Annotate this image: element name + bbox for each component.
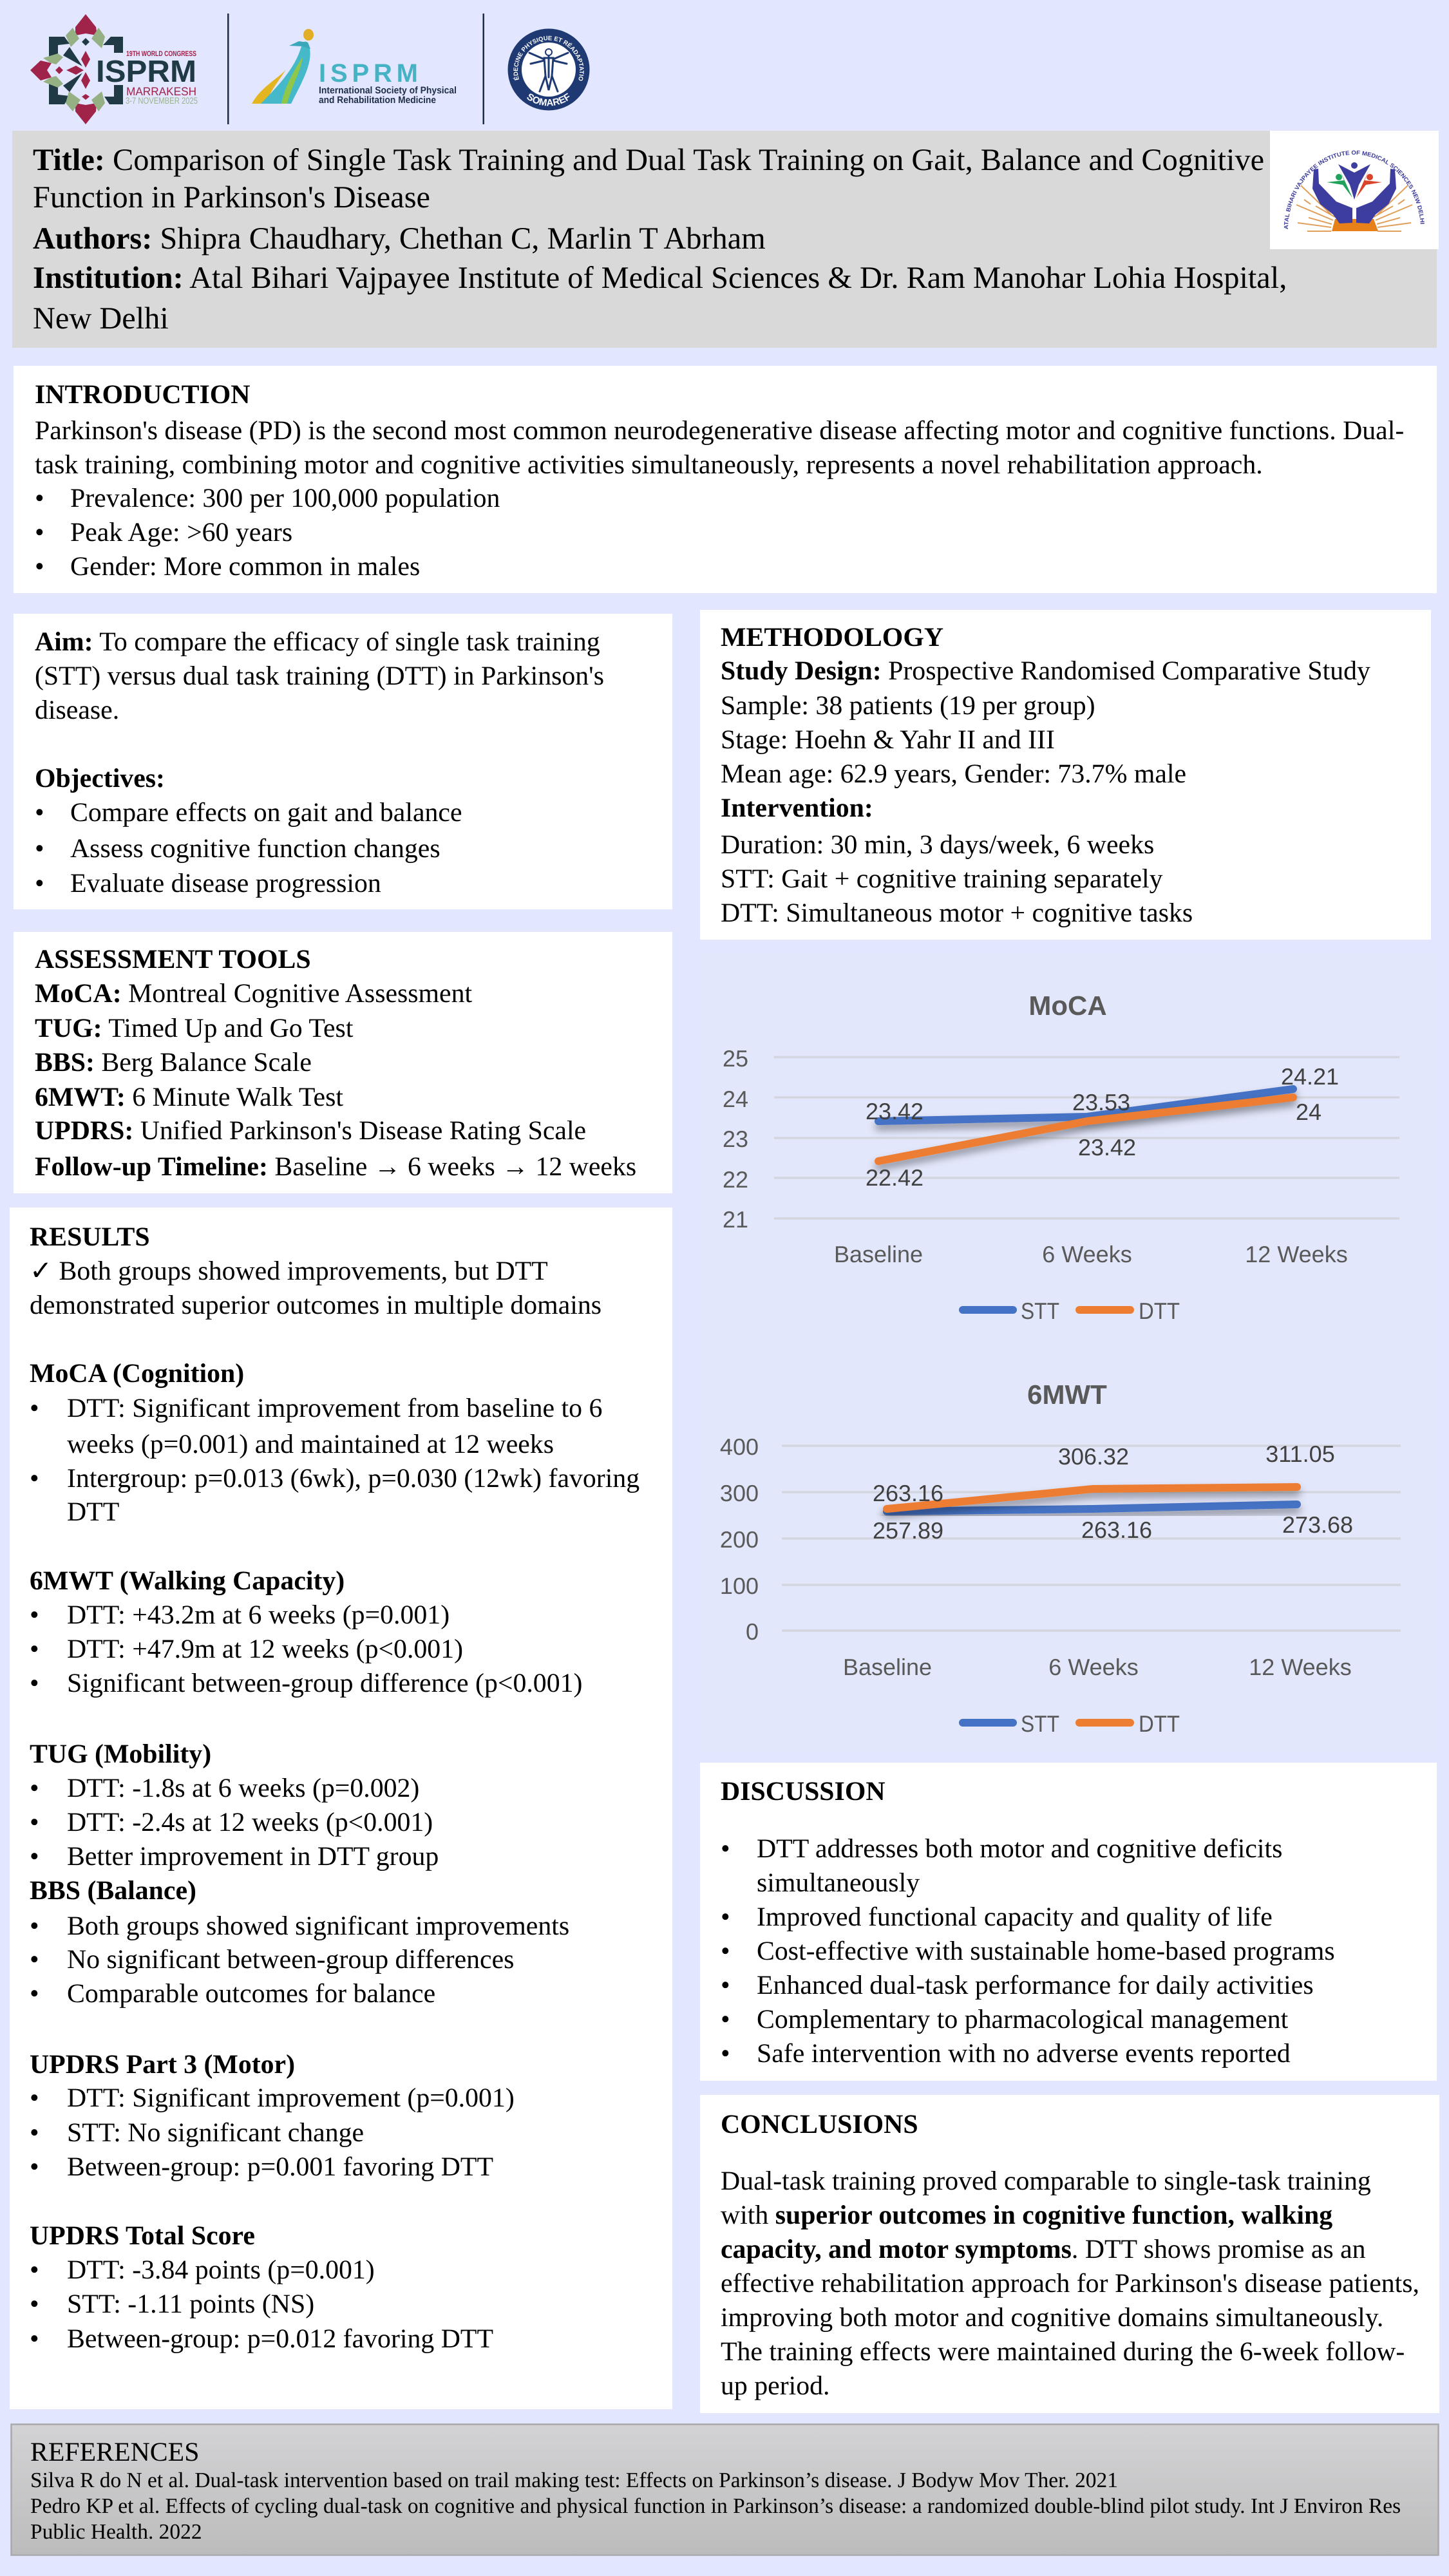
results: MoCA — [30, 1359, 639, 1527]
results: BBS: Comparable outcomes for balance — [67, 1979, 435, 2009]
logo: ISPRM 19th World Congress Marrakesh: ISPRM — [96, 55, 196, 89]
data labels: 24.21 — [1281, 1063, 1339, 1090]
data labels — [866, 1063, 1339, 1191]
results: 6MWT: DTT: +47.9m at 12 weeks (p<0.001) — [67, 1634, 463, 1664]
list: discussion points: • — [721, 1834, 730, 1864]
panel: introduction — [14, 366, 1437, 593]
text block: references: Public Health. 2022 — [30, 2520, 202, 2544]
results: TUG: TUG (Mobility) — [30, 1739, 211, 1769]
list: key facts: • — [35, 484, 44, 513]
chart: MoCA line chart — [723, 990, 1399, 1324]
results: TUG: • — [30, 1842, 39, 1871]
logo: ISPRM 19th World Congress Marrakesh — [30, 14, 198, 124]
results: UPDRS total: UPDRS Total Score — [30, 2221, 255, 2251]
study design: Stage: Hoehn & Yahr II and III — [721, 725, 1055, 755]
panel: discussion — [700, 1763, 1437, 2081]
list: discussion points: simultaneously — [757, 1868, 920, 1898]
text block: introduction — [35, 416, 1404, 480]
institution: Institution: Atal Bihari Vajpayee Institute of Medical Sciences & Dr. Ram Manohar Lohia Hospital, — [33, 261, 1287, 295]
logo: ISPRM society: International Society of Physical — [319, 85, 457, 96]
x axis labels: Baseline — [834, 1241, 923, 1267]
results: MoCA: • — [30, 1464, 39, 1493]
results: BBS: • — [30, 1979, 39, 2009]
study design: Sample: 38 patients (19 per group) — [721, 691, 1095, 721]
x axis labels: Baseline — [843, 1654, 932, 1680]
results: BBS: BBS (Balance) — [30, 1876, 196, 1906]
list: assessment tools: UPDRS: Unified Parkinson's Disease Rating Scale — [35, 1116, 586, 1146]
data labels: 24 — [1296, 1099, 1321, 1125]
line: DTT — [878, 1097, 1293, 1161]
legend: STT — [1021, 1298, 1059, 1324]
logo: Atal Bihari Vajpayee Institute: ATAL BIHARI VAJPAYEE INSTITUTE OF MEDICAL SCIENCES NEW DELHI — [1284, 151, 1425, 229]
y axis labels: 100 — [720, 1573, 759, 1599]
list: key facts: • — [35, 552, 44, 582]
results: UPDRS total: • — [30, 2324, 39, 2354]
list: key facts: Prevalence: 300 per 100,000 population — [70, 484, 500, 513]
list: discussion points: • — [721, 1902, 730, 1932]
results: 6MWT: • — [30, 1669, 39, 1698]
list: discussion points: Cost-effective with sustainable home-based programs — [757, 1937, 1335, 1966]
x axis labels: 12 Weeks — [1245, 1241, 1348, 1267]
results: UPDRS part 3: Between-group: p=0.001 favoring DTT — [67, 2152, 493, 2182]
aim text: Aim: To compare the efficacy of single task training — [35, 627, 600, 657]
intervention: Duration: 30 min, 3 days/week, 6 weeks — [721, 830, 1154, 860]
results: UPDRS part 3: • — [30, 2083, 39, 2113]
data labels: 263.16 — [873, 1480, 943, 1506]
y axis labels: 22 — [723, 1166, 748, 1193]
list: discussion points: • — [721, 2005, 730, 2034]
list: objectives: • — [35, 869, 44, 898]
list: discussion points: Enhanced dual-task performance for daily activities — [757, 1971, 1314, 2000]
results: 6MWT — [30, 1566, 582, 1698]
y axis labels: 21 — [723, 1206, 748, 1233]
list: discussion points: • — [721, 1937, 730, 1966]
results: UPDRS total: • — [30, 2289, 39, 2319]
data labels: 257.89 — [873, 1517, 943, 1544]
list: objectives: • — [35, 798, 44, 828]
list: assessment tools: BBS: Berg Balance Scale — [35, 1048, 312, 1077]
results: UPDRS part 3: • — [30, 2118, 39, 2148]
results: MoCA: DTT — [67, 1497, 119, 1527]
results: 6MWT: • — [30, 1634, 39, 1664]
results: UPDRS part 3: UPDRS Part 3 (Motor) — [30, 2050, 295, 2079]
intervention: DTT: Simultaneous motor + cognitive tasks — [721, 898, 1193, 928]
data labels: 311.05 — [1265, 1441, 1335, 1467]
y axis labels: 25 — [723, 1045, 748, 1072]
list: objectives: Compare effects on gait and balance — [70, 798, 462, 828]
y axis labels: 300 — [720, 1480, 759, 1506]
results: UPDRS total — [30, 2221, 493, 2354]
y axis labels: 24 — [723, 1086, 748, 1112]
logo: ISPRM 19th World Congress Marrakesh: 3-7 NOVEMBER 2025 — [126, 95, 198, 106]
list: key facts: • — [35, 518, 44, 547]
logo: ISPRM society: and Rehabilitation Medicine — [319, 95, 436, 106]
results: UPDRS part 3: STT: No significant change — [67, 2118, 364, 2148]
logo: ISPRM 19th World Congress Marrakesh: 19TH WORLD CONGRESS — [126, 50, 196, 58]
results: TUG: Better improvement in DTT group — [67, 1842, 439, 1871]
results: 6MWT: 6MWT (Walking Capacity) — [30, 1566, 345, 1596]
study design — [721, 656, 1370, 789]
logo: ISPRM society — [252, 29, 457, 106]
results: BBS: • — [30, 1911, 39, 1941]
heading: conclusions: CONCLUSIONS — [721, 2110, 918, 2139]
list: objectives — [35, 798, 462, 898]
text block: conclusions: capacity, and motor symptoms. DTT shows promise as an — [721, 2235, 1366, 2264]
y axis labels: 400 — [720, 1434, 759, 1460]
heading: references: REFERENCES — [30, 2438, 199, 2467]
text block: conclusions: effective rehabilitation approach for Parkinson's disease patients, — [721, 2269, 1419, 2298]
list: key facts: Gender: More common in males — [70, 552, 420, 582]
text block: conclusions: up period. — [721, 2371, 829, 2401]
legend: STT — [1021, 1710, 1059, 1737]
data labels: 22.42 — [866, 1164, 923, 1191]
results: MoCA: MoCA (Cognition) — [30, 1359, 244, 1388]
results: UPDRS part 3: DTT: Significant improvement (p=0.001) — [67, 2083, 515, 2113]
results: TUG — [30, 1739, 439, 1871]
text block: conclusions: Dual-task training proved comparable to single-task training — [721, 2166, 1371, 2196]
list: discussion points: • — [721, 2039, 730, 2069]
y axis labels: 0 — [746, 1618, 759, 1645]
list: assessment tools: TUG: Timed Up and Go Test — [35, 1014, 354, 1043]
results: UPDRS total: STT: -1.11 points (NS) — [67, 2289, 314, 2319]
x axis labels: 6 Weeks — [1048, 1654, 1139, 1680]
text block: conclusions: improving both motor and cognitive domains simultaneously. — [721, 2303, 1383, 2333]
logo: SOMAREF — [507, 28, 590, 111]
aim text: (STT) versus dual task training (DTT) in Parkinson's — [35, 661, 604, 691]
data labels: 263.16 — [1081, 1517, 1152, 1543]
text block: conclusions: The training effects were maintained during the 6-week follow- — [721, 2337, 1405, 2367]
intervention: STT: Gait + cognitive training separately — [721, 864, 1163, 894]
results: TUG: DTT: -2.4s at 12 weeks (p<0.001) — [67, 1808, 433, 1837]
chart title: 6MWT — [1027, 1379, 1107, 1410]
data labels: 23.42 — [866, 1098, 923, 1124]
list: assessment tools: 6MWT: 6 Minute Walk Test — [35, 1083, 343, 1112]
results: MoCA: • — [30, 1394, 39, 1423]
results: TUG: • — [30, 1808, 39, 1837]
results: BBS: No significant between-group differences — [67, 1945, 514, 1975]
logo: ISPRM 19th World Congress Marrakesh: MARRAKESH — [126, 85, 196, 98]
title: Function in Parkinson's Disease — [33, 180, 430, 214]
title — [33, 143, 1264, 214]
x axis labels: 6 Weeks — [1042, 1241, 1132, 1267]
line: DTT — [887, 1487, 1297, 1509]
panel: results — [10, 1208, 672, 2409]
results: UPDRS total: DTT: -3.84 points (p=0.001) — [67, 2255, 375, 2285]
y axis labels: 23 — [723, 1126, 748, 1152]
heading: introduction: INTRODUCTION — [35, 380, 250, 410]
results: BBS: Both groups showed significant improvements — [67, 1911, 569, 1941]
legend — [963, 1298, 1180, 1324]
chart title: MoCA — [1028, 990, 1107, 1021]
list: key facts — [35, 484, 500, 582]
results: BBS — [30, 1876, 569, 2009]
list: assessment tools — [35, 979, 636, 1182]
aim text: disease. — [35, 696, 119, 725]
results: TUG: • — [30, 1774, 39, 1803]
study design: Mean age: 62.9 years, Gender: 73.7% male — [721, 759, 1186, 789]
x axis labels: 12 Weeks — [1249, 1654, 1352, 1680]
heading: results: RESULTS — [30, 1222, 150, 1252]
list: objectives: Evaluate disease progression — [70, 869, 381, 898]
text block: references — [30, 2468, 1401, 2544]
data labels: 306.32 — [1058, 1443, 1129, 1470]
data labels — [873, 1441, 1353, 1544]
y axis labels: 200 — [720, 1526, 759, 1553]
logo: Atal Bihari Vajpayee Institute — [1270, 131, 1439, 249]
heading: discussion: DISCUSSION — [721, 1777, 886, 1806]
text block: introduction: Parkinson's disease (PD) is the second most common neurodegenerative disease affecting motor and cognitive functions. Dual- — [35, 416, 1404, 446]
summary — [30, 1256, 601, 1320]
results: UPDRS part 3 — [30, 2050, 515, 2182]
line: STT — [887, 1504, 1297, 1511]
data labels: 23.53 — [1072, 1089, 1130, 1115]
panel: conclusions — [700, 2095, 1439, 2413]
panel: title block — [12, 131, 1439, 348]
list: discussion points: Complementary to pharmacological management — [757, 2005, 1289, 2034]
panel: aim and objectives — [14, 614, 672, 909]
logo: SOMAREF: SOMAREF — [527, 93, 569, 106]
panel: references — [12, 2424, 1439, 2555]
list: assessment tools: MoCA: Montreal Cognitive Assessment — [35, 979, 473, 1009]
results: TUG: DTT: -1.8s at 6 weeks (p=0.002) — [67, 1774, 419, 1803]
intervention: Intervention: — [721, 793, 873, 823]
header logos — [30, 14, 590, 124]
panel: assessment tools — [14, 932, 672, 1193]
list: discussion points — [721, 1834, 1335, 2069]
results: MoCA: Intergroup: p=0.013 (6wk), p=0.030 (12wk) favoring — [67, 1464, 639, 1493]
x axis labels — [843, 1654, 1352, 1680]
text block: conclusions — [721, 2166, 1419, 2401]
list: assessment tools: Follow-up Timeline: Baseline → 6 weeks → 12 weeks — [35, 1152, 636, 1182]
text block: conclusions: with superior outcomes in cognitive function, walking — [721, 2201, 1332, 2230]
data labels: 273.68 — [1282, 1511, 1353, 1538]
title: Title: Comparison of Single Task Training and Dual Task Training on Gait, Balance and Cognitive — [33, 143, 1264, 177]
institution: New Delhi — [33, 301, 169, 336]
data labels: 23.42 — [1078, 1134, 1136, 1160]
list: discussion points: • — [721, 1971, 730, 2000]
summary: ✓ Both groups showed improvements, but DTT — [30, 1256, 548, 1286]
results: UPDRS part 3: • — [30, 2152, 39, 2182]
list: discussion points: Safe intervention with no adverse events reported — [757, 2039, 1291, 2069]
list: key facts: Peak Age: >60 years — [70, 518, 292, 547]
y axis labels — [720, 1434, 759, 1645]
legend — [963, 1710, 1180, 1737]
x axis labels — [834, 1241, 1348, 1267]
list: objectives: • — [35, 834, 44, 864]
line: STT — [878, 1089, 1293, 1121]
study design: Study Design: Prospective Randomised Comparative Study — [721, 656, 1370, 686]
heading: methodology: METHODOLOGY — [721, 623, 943, 652]
panel: methodology — [700, 610, 1431, 940]
results: MoCA: DTT: Significant improvement from baseline to 6 — [67, 1394, 602, 1423]
list: objectives: Assess cognitive function changes — [70, 834, 440, 864]
chart: 6MWT line chart — [720, 1379, 1401, 1737]
y axis labels — [723, 1045, 748, 1233]
text block: references: Pedro KP et al. Effects of cycling dual-task on cognitive and physical function in Parkinson’s disease: a randomized double-blind pilot study. Int J Environ Res — [30, 2494, 1401, 2518]
results: BBS: • — [30, 1945, 39, 1975]
list: discussion points: DTT addresses both motor and cognitive deficits — [757, 1834, 1282, 1864]
heading: objectives: Objectives: — [35, 764, 165, 793]
heading: assessment tools: ASSESSMENT TOOLS — [35, 945, 311, 974]
results: UPDRS total: Between-group: p=0.012 favoring DTT — [67, 2324, 493, 2354]
authors: Authors: Shipra Chaudhary, Chethan C, Marlin T Abrham — [33, 222, 766, 256]
logo: ISPRM society: ISPRM — [319, 59, 418, 88]
list: discussion points: Improved functional capacity and quality of life — [757, 1902, 1273, 1932]
text block: references: Silva R do N et al. Dual-task intervention based on trail making test: Effects on Parkinson’s disease. J Bodyw Mov Ther. 2021 — [30, 2468, 1118, 2492]
aim text — [35, 627, 604, 725]
results: MoCA: weeks (p=0.001) and maintained at 12 weeks — [67, 1430, 554, 1459]
legend: DTT — [1139, 1298, 1180, 1324]
institution — [33, 261, 1287, 336]
text block: introduction: task training, combining motor and cognitive activities simultaneously, represents a novel rehabilitation approach. — [35, 450, 1263, 480]
intervention — [721, 793, 1193, 928]
results: 6MWT: DTT: +43.2m at 6 weeks (p=0.001) — [67, 1600, 450, 1630]
results: 6MWT: • — [30, 1600, 39, 1630]
results: UPDRS total: • — [30, 2255, 39, 2285]
summary: demonstrated superior outcomes in multiple domains — [30, 1291, 601, 1320]
legend: DTT — [1139, 1710, 1180, 1737]
results: 6MWT: Significant between-group difference (p<0.001) — [67, 1669, 582, 1698]
